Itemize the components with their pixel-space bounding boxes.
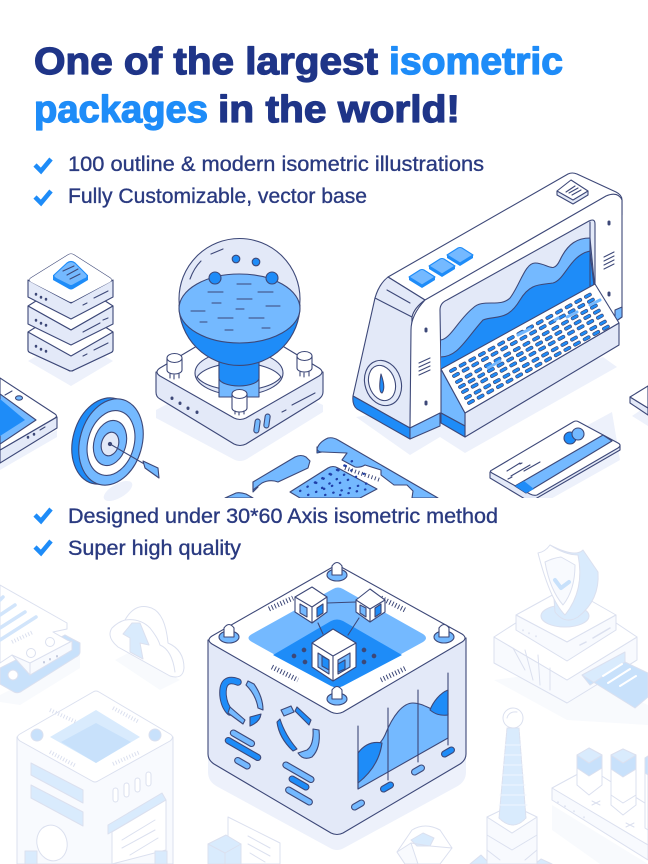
feature text: Designed under 30*60 Axis isometric method	[68, 505, 498, 528]
title	[34, 41, 563, 131]
feature list two	[35, 505, 498, 560]
faded illustration: gem	[397, 826, 452, 864]
top face	[209, 566, 465, 714]
knob	[167, 354, 182, 379]
title: in the world!	[218, 89, 460, 131]
title: packages	[34, 89, 208, 131]
big cube	[312, 629, 356, 681]
feature text: Fully Customizable, vector base	[68, 185, 367, 208]
feature list one	[35, 153, 484, 208]
keyboard	[465, 323, 619, 437]
illustration: server stack	[28, 254, 113, 386]
faded illustration: shield server	[494, 545, 648, 725]
illustration: small device at right edge	[630, 386, 648, 426]
illustration: monitor	[352, 172, 623, 455]
dotted chip	[290, 466, 377, 498]
front face	[410, 194, 622, 428]
faded illustration: document box	[208, 817, 280, 864]
icon: check	[35, 191, 51, 203]
connectors	[318, 602, 359, 635]
ring gauge right	[277, 706, 319, 758]
illustration: main cube	[208, 562, 466, 850]
title: One of the largest	[34, 41, 378, 83]
vents	[269, 598, 406, 680]
board shadow top	[225, 493, 253, 498]
feature text: Super high quality	[68, 537, 242, 560]
illustration: sphere device	[156, 238, 323, 461]
faded illustration: storage box	[17, 691, 173, 864]
faded illustration: hardware board	[0, 585, 80, 705]
dial	[359, 356, 407, 410]
knob	[232, 390, 247, 415]
knob	[297, 352, 312, 377]
icon: check	[35, 541, 51, 553]
illustration: target	[62, 390, 159, 505]
icon: check	[35, 509, 51, 521]
bottom bands	[353, 396, 410, 439]
title: isometric	[389, 41, 563, 83]
top vent box	[557, 180, 588, 204]
small cube left	[295, 587, 327, 623]
knobs	[219, 562, 454, 705]
illustration: phone	[0, 378, 57, 470]
faded illustration: rack of cylinders	[552, 748, 648, 864]
small cube right	[356, 589, 385, 622]
illustration: circuit board (cropped)	[225, 438, 438, 498]
ring gauge left	[223, 681, 263, 726]
icon: check	[35, 159, 51, 171]
illustration: credit card	[490, 412, 620, 505]
side faces	[208, 638, 466, 834]
screws and vents	[426, 222, 609, 404]
feature text: 100 outline & modern isometric illustrations	[68, 153, 484, 176]
top face	[388, 173, 622, 300]
left face	[353, 277, 425, 428]
legend bars left	[224, 729, 262, 770]
top buttons	[409, 248, 473, 288]
legend bars right	[282, 761, 315, 806]
faded illustration: cloud upload	[110, 607, 184, 690]
screen	[440, 220, 595, 372]
glass sphere	[179, 238, 300, 365]
area chart	[350, 673, 456, 811]
faded illustration: antenna tower	[470, 708, 552, 864]
